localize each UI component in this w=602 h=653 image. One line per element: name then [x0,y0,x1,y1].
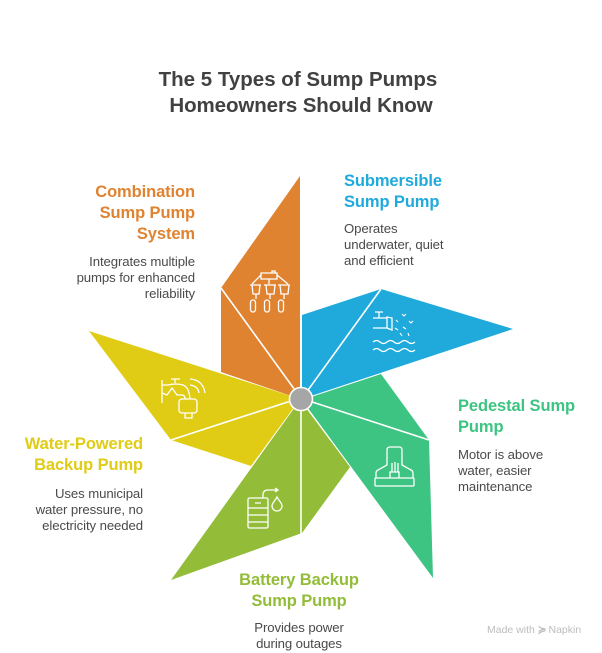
heading: combination: Combination [95,183,195,201]
description: battery: during outages [256,636,342,651]
icon: water discharge pipe [373,312,415,352]
label: battery [239,571,359,651]
heading: battery: Battery Backup [239,571,359,589]
segment: combination (orange) [221,176,300,399]
description: submersible: underwater, quiet [344,237,443,252]
label: submersible [344,172,444,268]
description: water-powered: water pressure, no [36,502,143,517]
heading: combination: Sump Pump [100,204,195,222]
description: combination: Integrates multiple [89,254,195,269]
description: battery [254,620,344,651]
heading: submersible: Submersible [344,172,442,190]
label: water-powered [24,435,143,533]
heading: pedestal: Pump [458,418,503,436]
description: battery: Provides power [254,620,344,635]
heading: pedestal: Pedestal Sump [458,397,575,415]
heading: battery [239,571,359,610]
title: Homeowners Should Know [169,94,433,117]
heading: combination: System [137,225,195,243]
segment: pedestal (green) [302,374,433,578]
heading: water-powered: Water-Powered [25,435,143,453]
description: pedestal: Motor is above [458,447,543,462]
description: pedestal: maintenance [458,479,532,494]
description: submersible [344,221,444,268]
heading: combination [95,183,195,243]
watermark: Made with ≽ Napkin [487,624,581,636]
description: combination: reliability [145,286,195,301]
segment: water-powered (yellow) [89,331,300,466]
title: The 5 Types of Sump Pumps [159,68,437,91]
icon: combination pumps [250,271,290,312]
icon: water-powered tap [162,379,205,418]
label: pedestal [458,397,575,494]
description: water-powered [36,486,143,533]
title [158,68,437,117]
center hub [290,388,312,410]
description: pedestal [458,447,543,494]
description: pedestal: water, easier [458,463,531,478]
heading: water-powered: Backup Pump [34,456,143,474]
description: combination: pumps for enhanced [77,270,195,285]
segment: submersible (blue) [302,289,513,399]
icon: battery and water drop [248,488,282,528]
description: submersible: Operates [344,221,397,236]
heading: battery: Sump Pump [251,592,347,610]
label: combination [77,183,195,301]
heading: submersible [344,172,442,211]
description: combination [77,254,195,301]
heading: water-powered [24,435,143,474]
segment: battery (olive) [171,400,350,580]
heading: pedestal [458,397,575,436]
description: submersible: and efficient [344,253,414,268]
heading: submersible: Sump Pump [344,193,439,211]
icon: pedestal pump [375,447,414,486]
description: water-powered: electricity needed [42,518,143,533]
description: water-powered: Uses municipal [55,486,143,501]
